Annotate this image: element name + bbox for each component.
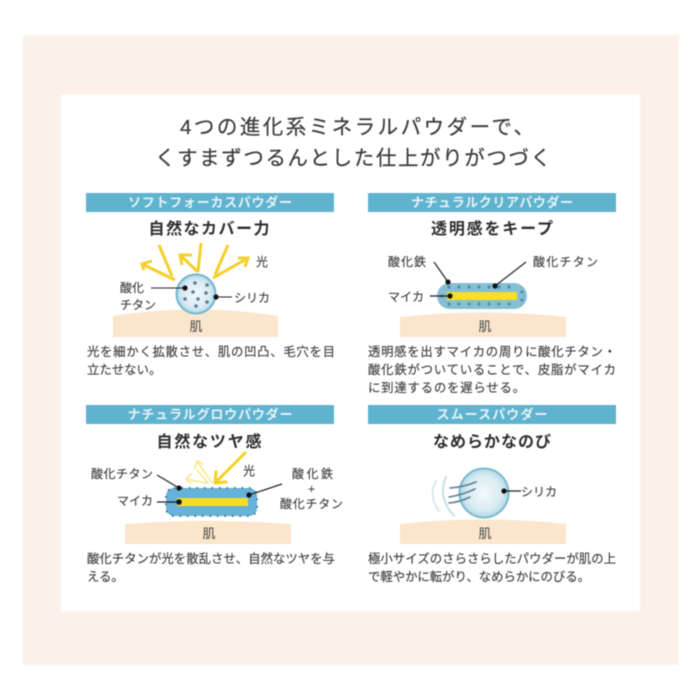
description (87, 344, 335, 377)
icon: silica sphere (460, 468, 508, 518)
description: 立たせない。 (87, 363, 161, 377)
panel: soft focus powder (86, 193, 335, 377)
skin (113, 310, 278, 337)
skin: 肌 (202, 526, 216, 541)
white content panel (61, 95, 640, 611)
description: 光を細かく拡散させ、肌の凹凸、毛穴を目 (87, 344, 335, 359)
label: light: 光 (243, 464, 255, 478)
panel: natural glow powder (86, 405, 343, 584)
icon: motion lines (433, 477, 476, 516)
label: iron oxide plus titanium oxide: 酸化チタン (280, 497, 343, 511)
label: titanium oxide: チタン (120, 298, 156, 312)
description (368, 551, 616, 584)
label: iron oxide: 酸化鉄 (388, 254, 426, 269)
label: titanium oxide (91, 467, 182, 491)
heading: keep transparency: 透明感をキープ (431, 219, 553, 238)
heading: smooth spread: なめらかなのび (433, 433, 551, 451)
skin (400, 520, 566, 544)
label: silica (501, 485, 557, 499)
skin (400, 312, 566, 337)
heading: natural coverage: 自然なカバー力 (148, 219, 270, 238)
header bar: natural clear (368, 193, 616, 212)
skin: 肌 (478, 526, 492, 541)
description: に到達するのを遅らせる。 (368, 381, 525, 395)
label: titanium oxide (120, 281, 188, 312)
label: titanium oxide: 酸化チタン (91, 467, 153, 481)
icon: capsule particle (166, 488, 257, 516)
title: くすまずつるんとした仕上がりがつづく (155, 147, 551, 170)
header bar: smooth: スムースパウダー (436, 407, 548, 422)
label: titanium oxide: 酸化チタン (533, 255, 598, 269)
label: iron oxide (388, 254, 451, 285)
label: silica: シリカ (521, 485, 557, 499)
label: silica: シリカ (234, 291, 270, 305)
header bar: soft focus: ソフトフォーカスパウダー (128, 195, 292, 210)
label: iron oxide plus titanium oxide (246, 466, 343, 511)
description: 酸化チタンが光を散乱させ、自然なツヤを与 (87, 551, 335, 566)
icon: light arrows (186, 453, 245, 483)
label: silica (213, 291, 270, 305)
label: mica: マイカ (388, 290, 424, 304)
heading: natural glow: 自然なツヤ感 (156, 432, 262, 451)
skin: 肌 (189, 319, 203, 334)
description (87, 551, 335, 584)
icon: light arrows (142, 243, 248, 280)
label: titanium oxide: 酸化 (120, 281, 144, 295)
header bar: natural clear: ナチュラルクリアパウダー (411, 195, 573, 210)
title (155, 116, 551, 170)
label: mica (388, 290, 453, 304)
label: titanium oxide (492, 255, 598, 289)
panel: natural clear powder (368, 193, 616, 395)
label: mica (117, 494, 182, 508)
label: iron oxide plus titanium oxide: 酸化鉄 (292, 466, 333, 481)
header bar: natural glow: ナチュラルグロウパウダー (128, 407, 292, 422)
header bar: smooth (368, 405, 616, 424)
description: 極小サイズのさらさらしたパウダーが肌の上 (368, 551, 616, 566)
header bar: soft focus (86, 193, 334, 212)
label: light: 光 (256, 255, 268, 269)
description: 透明感を出すマイカの周りに酸化チタン・ (368, 344, 616, 359)
title: 4つの進化系ミネラルパウダーで、 (180, 116, 534, 139)
label: mica: マイカ (117, 494, 153, 508)
panel: smooth powder (368, 405, 616, 584)
label: iron oxide plus titanium oxide: + (308, 482, 315, 496)
description: 酸化鉄がついていることで、皮脂がマイカ (368, 362, 616, 377)
description (368, 344, 616, 395)
description: で軽やかに転がり、なめらかにのびる。 (368, 569, 590, 584)
skin (125, 521, 291, 544)
icon: silica sphere (176, 274, 216, 314)
icon: capsule particle (437, 283, 527, 309)
description: える。 (87, 570, 124, 584)
header bar: natural glow (86, 405, 334, 424)
skin: 肌 (478, 319, 492, 334)
